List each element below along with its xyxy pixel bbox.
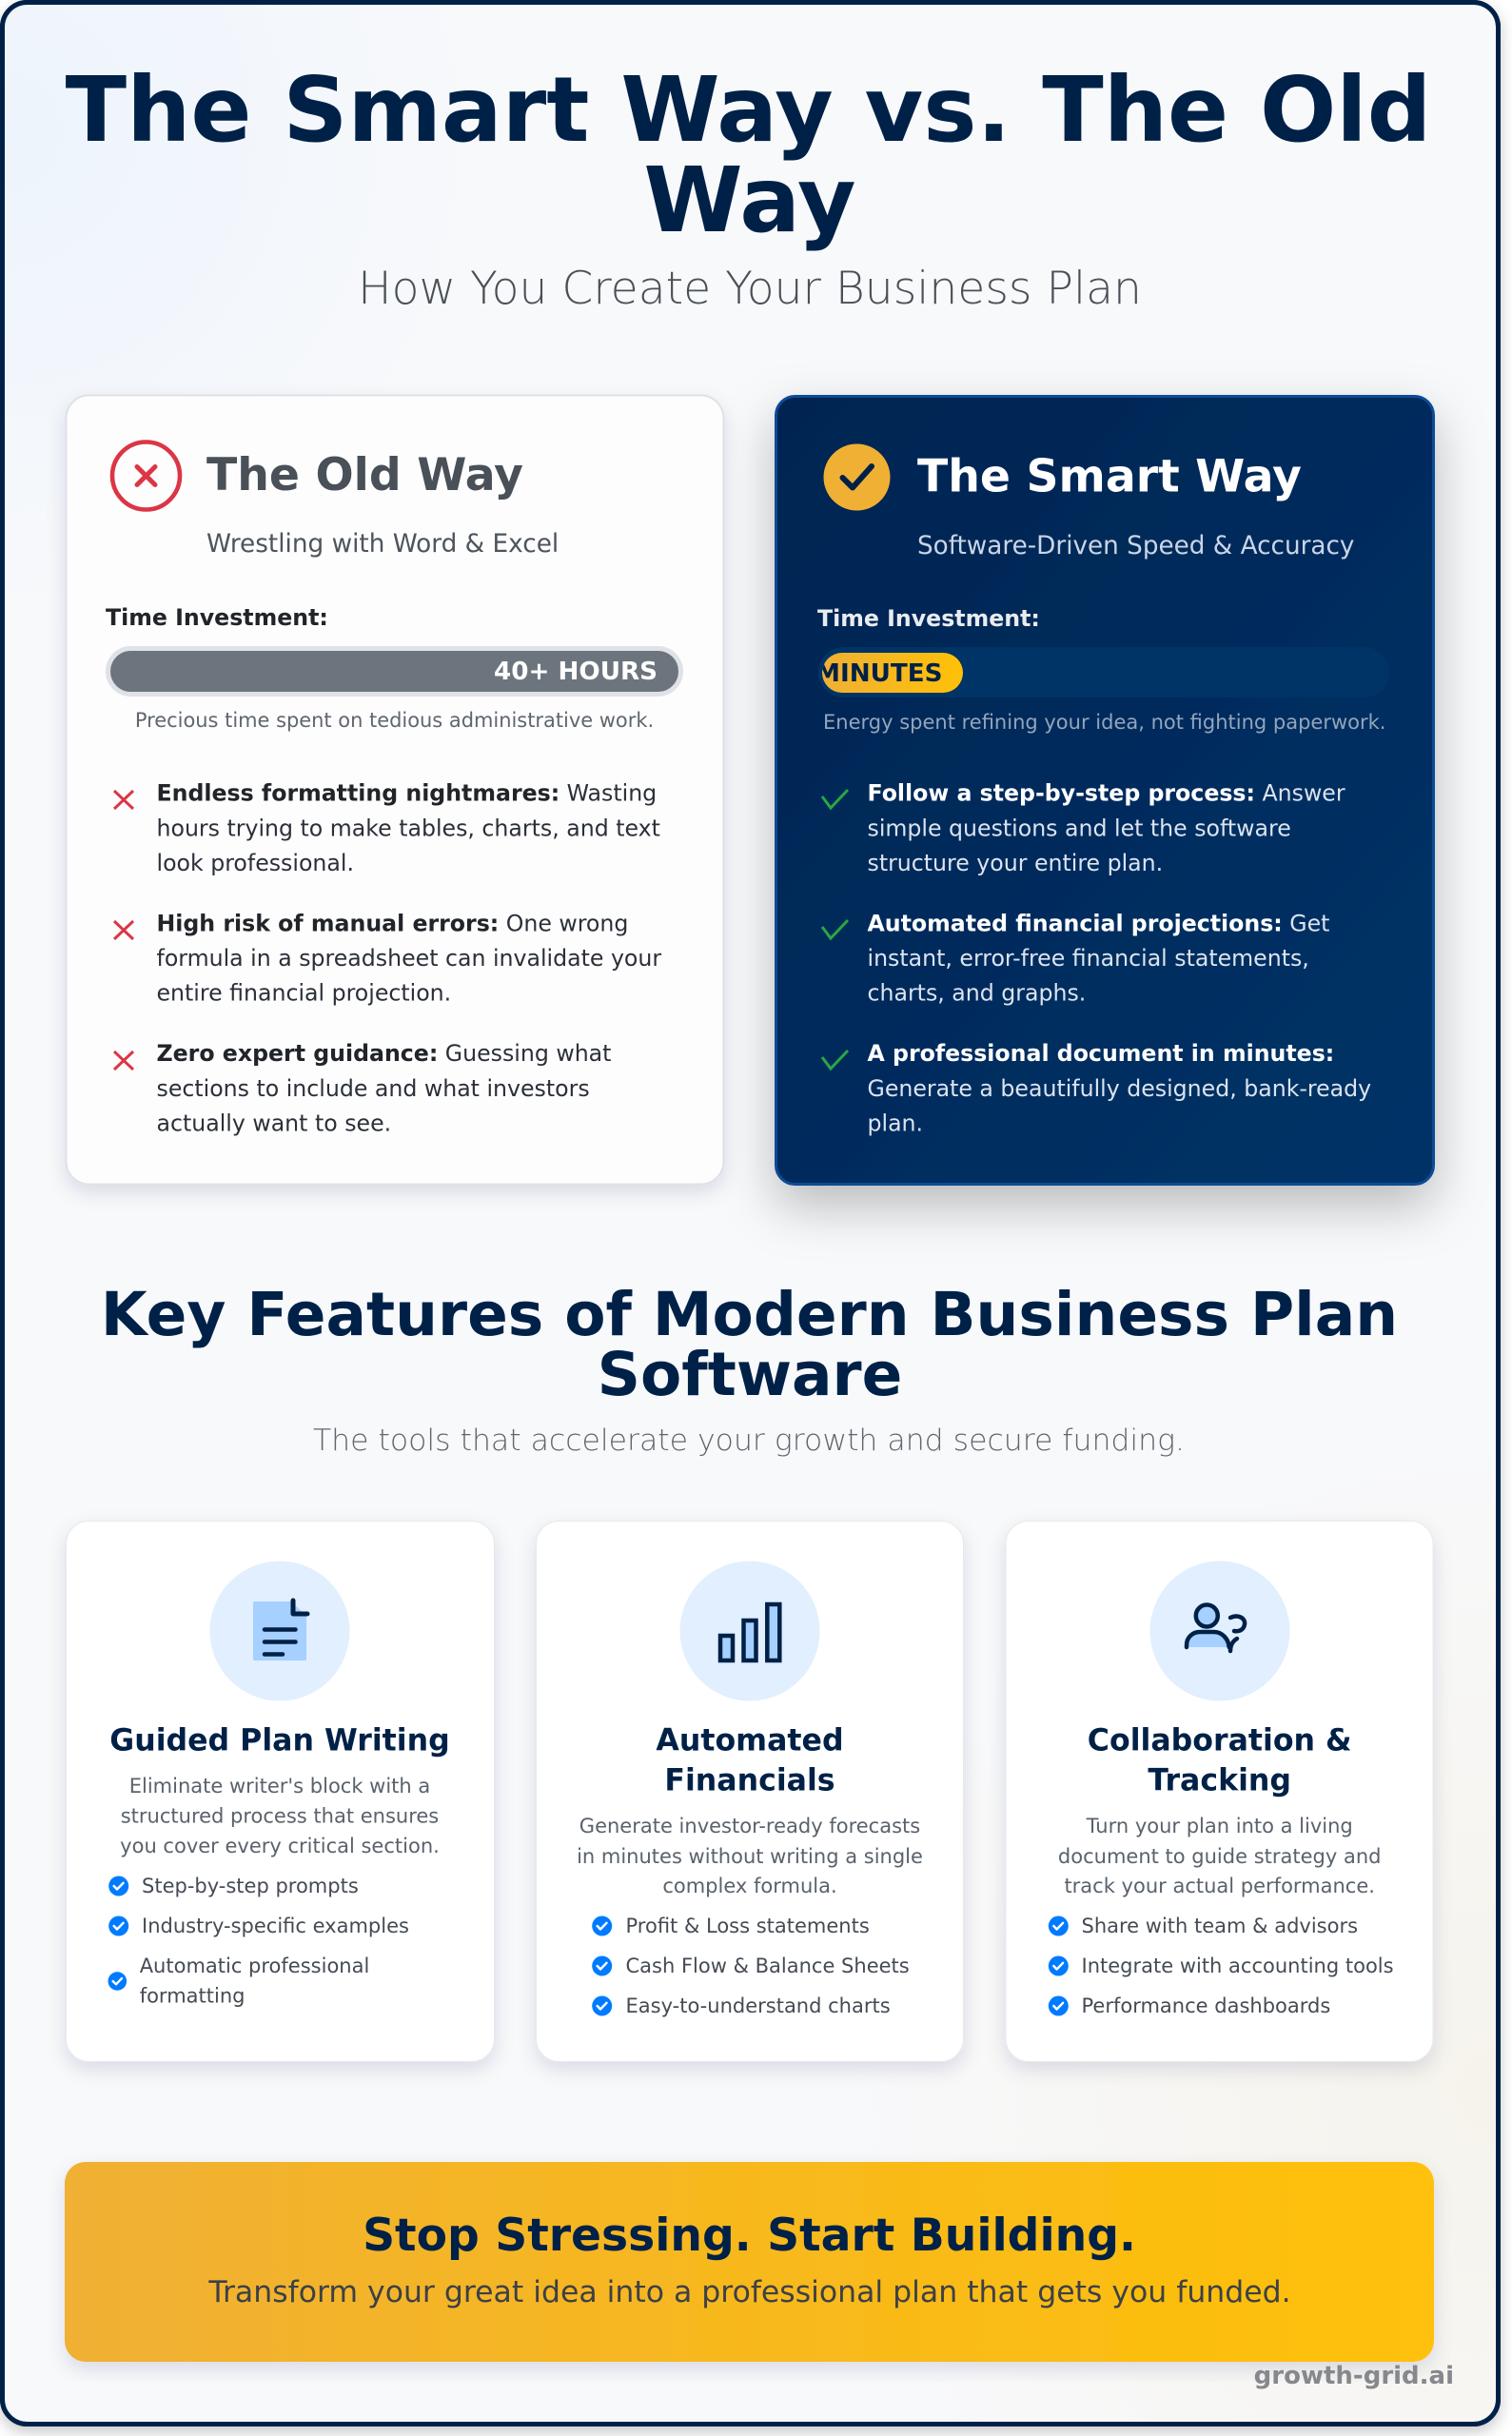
panel: collaboration and tracking (1006, 1521, 1433, 2061)
section heading: key features: Key Features of Modern Business Plan (101, 1280, 1398, 1349)
section heading: key features: Software (598, 1340, 902, 1409)
item: manual errors (114, 910, 661, 1007)
heading (1088, 1724, 1352, 1798)
item: Performance dashboards (1081, 1994, 1330, 2017)
item: Step-by-step prompts (142, 1875, 359, 1897)
item: step-by-step: Follow a step-by-step process: Answer (868, 780, 1345, 807)
item: formatting (140, 1985, 245, 2008)
caption: smart way time: Energy spent refining your idea, not fighting paperwork. (823, 711, 1385, 734)
item: formatting nightmares: look professional. (156, 850, 354, 876)
item: professional document (822, 1040, 1371, 1136)
caption: old way time: Precious time spent on tedious administrative work. (135, 709, 654, 732)
watermark: growth-grid.ai (1254, 2362, 1454, 2390)
item: step-by-step: simple questions and let the software (868, 815, 1291, 841)
panel: guided plan writing (67, 1521, 495, 2061)
item: financial projections: instant, error-free financial statements, (868, 945, 1309, 972)
heading: the smart way: The Smart Way (917, 451, 1302, 502)
item: financial projections (822, 910, 1329, 1007)
icon: bar chart (679, 1561, 820, 1701)
call to action heading: Stop Stressing. Start Building. (363, 2210, 1136, 2262)
feature list (592, 1915, 910, 2017)
description (1058, 1815, 1381, 1897)
description: Turn your plan into a living (1086, 1815, 1353, 1837)
item: step-by-step: structure your entire plan. (868, 850, 1163, 876)
section heading: key features (101, 1280, 1398, 1409)
item: Cash Flow & Balance Sheets (626, 1955, 910, 1977)
bar: minutes: MINUTES (815, 659, 942, 688)
feature list (108, 1875, 409, 2008)
call to action text: Transform your great idea into a professional plan that gets you funded. (207, 2275, 1291, 2309)
item: expert guidance: Zero expert guidance: Guessing what (156, 1040, 611, 1067)
description (120, 1775, 440, 1857)
item: professional document: plan. (868, 1110, 923, 1136)
title (66, 58, 1431, 253)
section subheading: The tools that accelerate your growth and secure funding. (313, 1424, 1185, 1458)
title: Way (643, 148, 856, 253)
item: Share with team & advisors (1081, 1915, 1358, 1937)
subheading: old way: Wrestling with Word & Excel (206, 530, 559, 559)
item: manual errors: entire financial projection. (156, 980, 451, 1007)
bar: 40+ hours (108, 649, 681, 695)
item: financial projections: charts, and graphs. (868, 980, 1086, 1007)
list: old way problems (114, 780, 661, 1136)
item: Integrate with accounting tools (1081, 1955, 1394, 1977)
item: expert guidance: sections to include and what investors (156, 1075, 590, 1102)
item: professional document: A professional document in minutes: (868, 1040, 1334, 1067)
icon: person with speech (1149, 1561, 1290, 1701)
item: professional document: Generate a beautifully designed, bank-ready (868, 1075, 1371, 1102)
description: Generate investor-ready forecasts (579, 1815, 920, 1837)
item: formatting nightmares: hours trying to make tables, charts, and text (156, 815, 660, 841)
title: The Smart Way vs. The Old (66, 58, 1431, 163)
description: Eliminate writer's block with a (129, 1775, 430, 1798)
icon: gold check in circle (824, 443, 891, 510)
subtitle: How You Create Your Business Plan (358, 263, 1142, 315)
list: smart way benefits (822, 780, 1371, 1136)
heading: Tracking (1148, 1764, 1291, 1798)
description (577, 1815, 923, 1897)
item: manual errors: formula in a spreadsheet can invalidate your (156, 945, 661, 972)
panel: the old way (67, 396, 723, 1184)
item: Easy-to-understand charts (626, 1994, 891, 2017)
heading: Collaboration & (1088, 1724, 1352, 1758)
item (108, 1955, 369, 2008)
heading (656, 1724, 844, 1798)
description: track your actual performance. (1064, 1875, 1375, 1897)
item: step-by-step (822, 780, 1345, 876)
feature list (1049, 1915, 1394, 2017)
bar: minutes (815, 647, 1389, 697)
item: formatting nightmares: Endless formatting nightmares: Wasting (156, 780, 657, 807)
description: document to guide strategy and (1058, 1845, 1381, 1868)
item: Profit & Loss statements (626, 1915, 870, 1937)
label: time investment: Time Investment: (817, 605, 1040, 632)
icon: red cross in circle (112, 442, 180, 510)
heading: Guided Plan Writing (109, 1724, 450, 1758)
call to action banner (65, 2162, 1434, 2362)
item: formatting nightmares (114, 780, 660, 876)
heading: Financials (664, 1764, 835, 1798)
label: time investment: Time Investment: (106, 604, 328, 631)
heading: Automated (656, 1724, 844, 1758)
item: financial projections: Automated financial projections: Get (868, 910, 1329, 936)
subheading: smart way: Software-Driven Speed & Accuracy (917, 532, 1354, 560)
description: structured process that ensures (121, 1805, 439, 1828)
item: manual errors: High risk of manual errors: One wrong (156, 910, 628, 936)
panel: automated financials (537, 1521, 963, 2061)
item: expert guidance (114, 1040, 611, 1136)
description: in minutes without writing a single (577, 1845, 923, 1868)
item: Industry-specific examples (142, 1915, 409, 1937)
item: expert guidance: actually want to see. (156, 1110, 391, 1136)
bar: 40+ hours: 40+ HOURS (494, 658, 658, 686)
description: complex formula. (662, 1875, 837, 1897)
item: Automatic professional (140, 1955, 369, 1977)
heading: the old way: The Old Way (206, 449, 523, 501)
panel: the smart way (776, 396, 1433, 1184)
icon: document (209, 1561, 350, 1701)
description: you cover every critical section. (120, 1835, 440, 1857)
